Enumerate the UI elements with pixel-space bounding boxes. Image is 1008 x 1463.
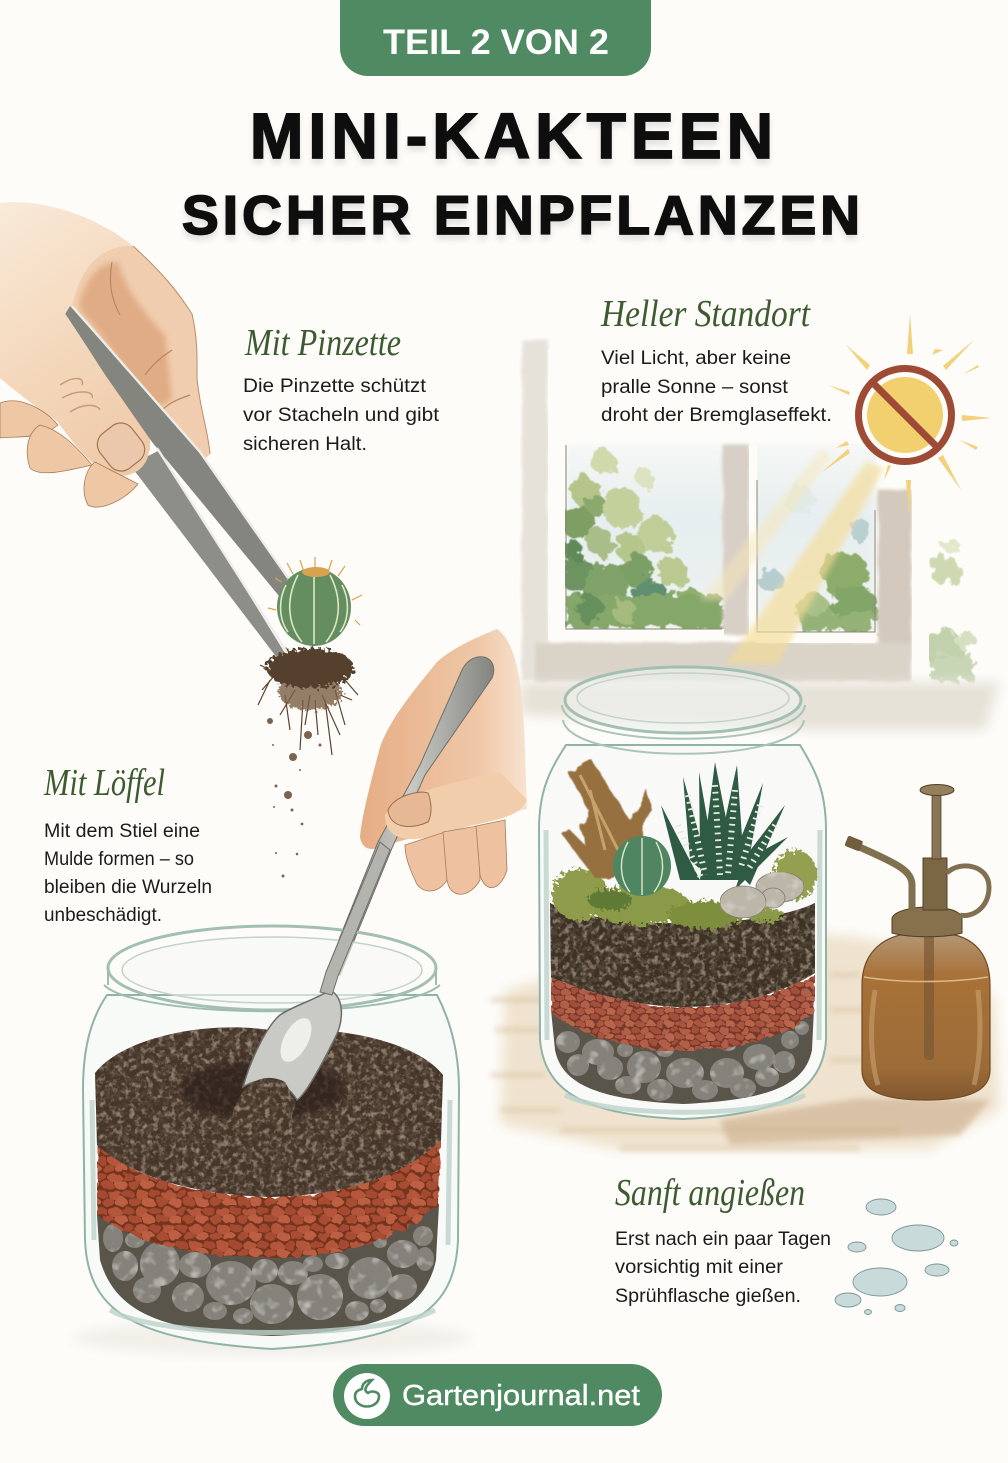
sun rays beam: [700, 448, 884, 664]
title: [182, 100, 860, 246]
spoon handle over rim: [320, 842, 390, 995]
text block: Mit Pinzette: Die Pinzette schützt: [243, 376, 427, 397]
pebbles: [103, 1224, 434, 1324]
text block: Mit Pinzette: sicheren Halt.: [243, 434, 367, 455]
footer badge: [333, 1364, 662, 1426]
text block: Heller Standort: [600, 293, 832, 426]
jar lip: [104, 968, 440, 1011]
illustration: left glass jar: [72, 842, 472, 1356]
thin beam: [700, 448, 832, 600]
upper arm highlight: [72, 306, 288, 578]
tab: part label: TEIL 2 VON 2: [383, 23, 609, 62]
palm: [0, 202, 192, 476]
wood streaks: [490, 975, 900, 1148]
clay granule layer: [97, 1130, 441, 1258]
lower arm highlight: [157, 448, 292, 660]
jar ground shadow: [72, 1320, 472, 1356]
fingers: [405, 820, 507, 894]
thumb nail: [92, 417, 150, 477]
pump knob: [920, 784, 954, 796]
soil layer: [550, 903, 815, 1007]
window scene: [522, 340, 975, 682]
root ball: [266, 648, 354, 688]
illustration: hand with spoon: [326, 629, 527, 975]
pump rod: [932, 793, 941, 859]
knuckle lines: [60, 379, 100, 412]
greenery beside window: [925, 537, 975, 680]
soil heap on spoon: [232, 1078, 296, 1125]
bottle highlights: [872, 990, 980, 1085]
jar shine: [546, 830, 820, 1112]
greenery outside right pane: [758, 485, 879, 634]
illustration: hand with tweezers: [0, 202, 292, 667]
roots and soil: [258, 648, 358, 755]
pump collar: [923, 858, 947, 910]
text block: Heller Standort: pralle Sonne – sonst: [601, 377, 789, 398]
pebble layer: [97, 1205, 439, 1336]
cactus spines: [268, 557, 362, 625]
wide beam: [726, 462, 884, 664]
window sky: [566, 445, 876, 631]
jar rim: [565, 667, 801, 733]
text block: Mit Pinzette: vor Stacheln und gibt: [243, 405, 440, 426]
sun rays: [822, 314, 992, 516]
upper arm: [64, 306, 288, 596]
soil layer: [95, 1027, 443, 1197]
window white strips: [548, 350, 929, 680]
pebble layer: [551, 1008, 814, 1104]
jar rim inner: [122, 937, 422, 1003]
back fingers: [70, 246, 210, 458]
text block: Sanft angießen: Erst nach ein paar Tagen: [615, 1229, 831, 1250]
text block: Heller Standort: Viel Licht, aber keine: [601, 348, 791, 369]
finger creases: [110, 262, 190, 415]
spoon bowl: [243, 990, 341, 1100]
greenery outside left pane: [560, 450, 722, 629]
text block: Mit Löffel: Mit dem Stiel eine: [44, 821, 200, 842]
inner tube: [924, 935, 934, 1060]
tab: part label: [340, 0, 651, 76]
thumb: [385, 772, 527, 839]
bottle shadow: [720, 1098, 990, 1145]
cactus top: [302, 567, 330, 577]
text block: Sanft angießen: [615, 1172, 831, 1307]
clay granule layer: [551, 973, 815, 1051]
prohibition ring: [858, 368, 952, 462]
pebbles: [556, 1021, 809, 1101]
liquid line: [864, 977, 988, 982]
sill shadow: [520, 682, 1000, 730]
illustration: amber spray bottle: [844, 784, 990, 1100]
prohibition slash: [873, 383, 937, 447]
bowl highlight: [274, 1013, 318, 1067]
text block: Mit Löffel: Mulde formen – so: [44, 849, 194, 870]
text block: Mit Löffel: unbeschädigt.: [44, 905, 162, 926]
text block: Mit Pinzette: Mit Pinzette: [244, 322, 401, 364]
wood top: [500, 934, 1000, 1150]
text block: Sanft angießen: Sanft angießen: [615, 1172, 805, 1214]
text block: Mit Löffel: Mit Löffel: [43, 762, 165, 804]
jar rim inner: [577, 673, 789, 723]
finger shading: [80, 262, 172, 410]
lower loose soil: [278, 674, 342, 710]
fingers below: [0, 401, 138, 507]
title: MINI-KAKTEEN: [250, 100, 773, 172]
text block: Mit Löffel: [43, 762, 212, 926]
jar neck rings: [562, 705, 805, 754]
root strands: [258, 665, 358, 755]
spoon handle: [326, 657, 494, 975]
window edge lines: [566, 445, 875, 632]
icon: sun with prohibition sign: [822, 314, 992, 516]
handle ring: [947, 866, 989, 916]
decor stones: [720, 872, 804, 918]
water drops: [835, 1199, 958, 1314]
nozzle: [844, 835, 863, 852]
small cactus: [613, 836, 671, 896]
text block: Sanft angießen: vorsichtig mit einer: [615, 1257, 784, 1278]
spout: [848, 842, 912, 910]
falling soil crumbs: [267, 718, 322, 878]
icon: plant logo: [344, 1373, 390, 1419]
zebra succulent: [661, 762, 788, 890]
lower arm: [130, 450, 288, 667]
brand name: Gartenjournal.net: [402, 1380, 640, 1412]
cactus body: [277, 568, 351, 646]
driftwood: [563, 760, 650, 880]
tweezers: [64, 306, 292, 667]
wooden table and sill: [490, 682, 1000, 1150]
illustration: right glass jar with plants: [539, 667, 826, 1119]
driftwood highlight: [580, 775, 618, 850]
cap: [892, 907, 962, 937]
title: SICHER EINPFLANZEN: [182, 184, 860, 246]
text block: Mit Löffel: bleiben die Wurzeln: [44, 877, 212, 898]
text block: Mit Pinzette: [243, 322, 440, 455]
thumb nail: [388, 792, 431, 826]
text block: Heller Standort: Heller Standort: [600, 293, 811, 335]
illustration: cactus with root ball: [258, 557, 362, 755]
bottle glass: [862, 935, 990, 1100]
hand outline: [133, 246, 210, 454]
moss: [552, 850, 817, 929]
text block: Sanft angießen: Sprühflasche gießen.: [615, 1286, 801, 1307]
text block: Heller Standort: droht der Bremglaseffekt.: [601, 405, 832, 426]
soil hollow: [180, 1060, 344, 1120]
thumb: [0, 295, 149, 476]
window frame: [522, 340, 912, 682]
sun disk: [867, 377, 943, 453]
cactus ribs: [281, 572, 347, 644]
jar body: [83, 995, 459, 1349]
jar rim: [108, 926, 436, 1010]
jar shine: [92, 1100, 450, 1332]
back of hand: [360, 629, 527, 849]
jar body: [539, 745, 826, 1119]
